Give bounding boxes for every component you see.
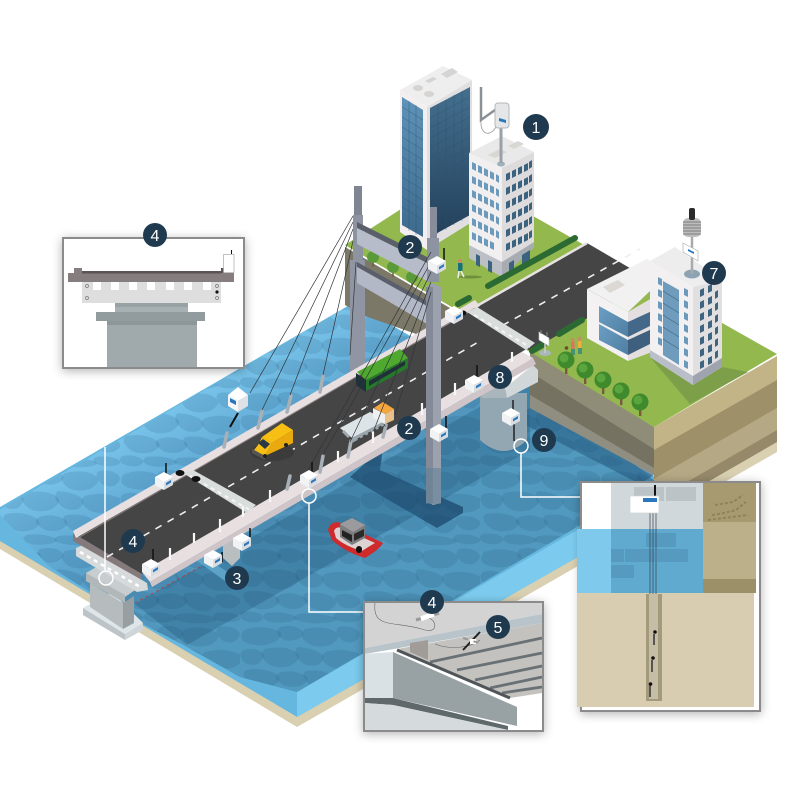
front pylon [426,207,441,505]
slab: sand base [0,442,777,727]
tower roof units [413,68,458,97]
marker 1 [523,114,549,140]
panel: abutment elevation [63,238,244,368]
marker 8: 8 [496,370,505,387]
land: building shadow [650,357,748,404]
connector: pier to borehole panel [514,439,582,497]
section: cables [650,513,656,594]
connector: west abutment to panel [99,447,113,585]
centre dashes [107,341,480,557]
marker 5 [486,615,510,639]
marker 4 panel [143,223,167,247]
marker 7 [702,261,726,285]
section: air above pile [611,483,703,529]
road on land [475,243,652,351]
water: open area past the bridge [128,378,655,692]
panel: borehole section [577,482,760,711]
hedges along road [458,238,582,351]
marker 4 underside: 4 [428,595,437,612]
bridge pier under east end [480,365,538,451]
water: pylon shadow [350,447,463,528]
stay cables [250,216,431,472]
elevation: deck beam [68,268,234,282]
marker 9: 9 [540,433,549,450]
marker 2 upper [398,235,422,259]
sensor: road joint [445,306,463,324]
water: shoreline shade [512,408,654,484]
soil: dark stratum [530,372,654,468]
deck asphalt [73,307,530,574]
section: grey blocks above water [634,487,696,501]
north barrier [73,300,480,538]
panel: deck underside [364,602,543,731]
weather station with logger [683,208,701,278]
marker 9 [532,428,556,452]
small building windows [472,162,499,250]
bridge deck [73,300,536,640]
abutment bearing strip [76,545,148,592]
sensor: pylon upper [428,248,446,274]
land: soil right face [654,356,777,513]
road edge line on land [475,243,587,307]
land: green top [345,173,777,427]
south barrier grey posts [287,425,386,489]
sensor: large cube on cable [228,387,248,427]
east expansion joint [467,307,535,350]
mid pier with dataloggers [223,535,240,566]
group of pedestrians [565,337,582,355]
section: water column [577,529,703,593]
underside: tilt sensor [416,610,450,621]
marker 8 [488,365,512,389]
marker 3 [225,566,249,590]
underside: cable [375,603,480,647]
sensor: pier water level [502,400,520,441]
right tall building [650,247,722,385]
marker 4 deck: 4 [129,534,138,551]
red dashed cable [135,567,200,603]
deck end face [73,533,142,580]
elevation: lattice plate [82,282,221,303]
section: riverbed [577,593,754,707]
section: piezometers [649,630,657,697]
marker 2 lower [397,416,421,440]
water: stripe below mid pier [193,554,232,581]
marker 3: 3 [233,571,242,588]
section: soil strata [703,483,756,593]
marker 5: 5 [494,620,503,637]
west expansion joint [183,470,256,513]
section: logger [630,485,659,513]
land: soil left face [345,247,654,475]
section: borehole casing [646,594,662,701]
elevation: pier stack [96,303,205,367]
underside: deck soffit [365,603,542,648]
marker 2 upper: 2 [406,240,415,257]
vehicle: red rescue boat [328,518,383,558]
underside: main girder [365,652,517,730]
marker 1: 1 [532,120,541,137]
south barrier white posts [170,352,512,560]
vehicle: yellow van [250,423,294,461]
water: bridge shadow band [135,378,530,645]
elevation: sensor [224,250,234,272]
sensors: pier dataloggers [204,528,251,568]
roadside sign with sensor [539,330,551,356]
south barrier [142,352,533,582]
underside: ribs [397,623,542,698]
water surface [0,303,655,692]
back pylon [350,186,427,390]
north barrier posts [224,376,323,447]
row of trees [558,352,648,416]
sensor: north deck west [155,463,173,490]
runner [458,259,482,278]
crack gauges on joint [176,310,466,482]
sensor mast with gateway on small building [481,87,509,166]
trees seen through pylon beams [367,251,418,287]
water: ripple texture [0,303,655,692]
marker 4 underside [420,590,444,614]
underside: strain gauge [463,632,482,650]
small building roof units [488,141,524,158]
marker 4 deck [121,529,145,553]
right low building [587,259,670,361]
underside: soffit edge [365,614,542,654]
sensor: pylon lower [430,416,448,442]
small office building [469,136,534,277]
road centre dashes on land [478,249,640,339]
sensor: south deck mid [300,462,318,488]
slab: water block sides [0,303,655,717]
sensor: south deck east [465,365,483,393]
connector: deck to underside panel [302,489,365,612]
marker 4 panel: 4 [151,228,160,245]
vehicle: flatbed truck [340,402,394,443]
tall glass tower [400,66,472,250]
marker 2 lower: 2 [405,421,414,438]
vehicle: green bus [356,349,408,392]
sensor: south deck end [142,549,160,577]
west abutment pier [83,558,143,640]
marker 7: 7 [710,266,719,283]
